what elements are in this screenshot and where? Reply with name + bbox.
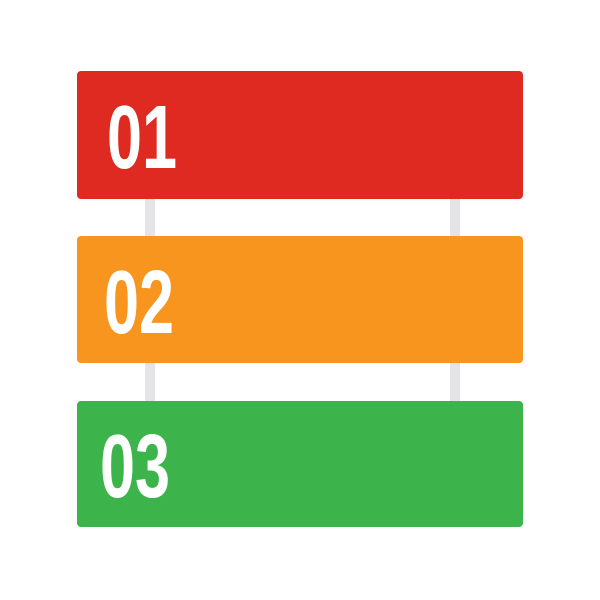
number 03: 03	[100, 417, 170, 517]
connector 1 right	[450, 199, 460, 236]
connector 2 right	[450, 363, 460, 401]
panel: 02	[77, 236, 523, 363]
connector 1 left	[145, 199, 155, 236]
number 02: 02	[104, 253, 174, 353]
number 01: 01	[107, 88, 177, 188]
panel: 03	[77, 401, 523, 527]
panel: 01	[77, 71, 523, 199]
connector 2 left	[145, 363, 155, 401]
